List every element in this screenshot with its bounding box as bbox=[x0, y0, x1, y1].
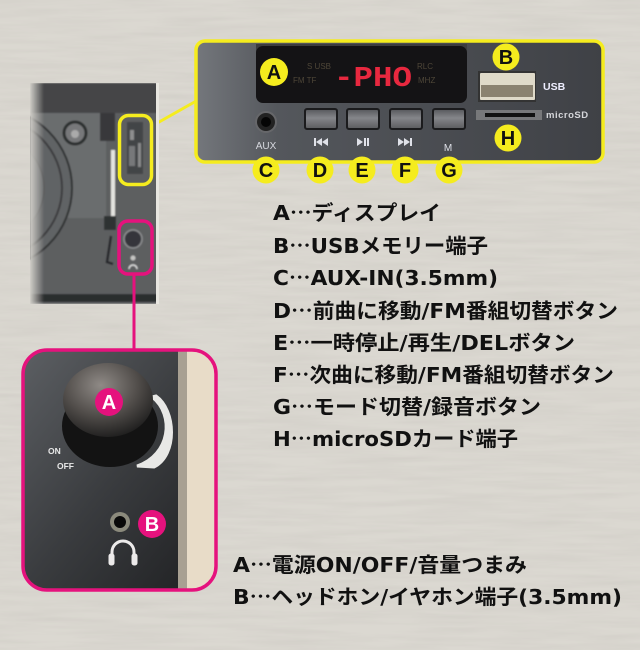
text block: panel legend: H…microSDカード端子 bbox=[273, 422, 518, 452]
microSD slot: microSD bbox=[546, 110, 589, 121]
display window: S USB bbox=[307, 62, 331, 71]
miniature control panel bbox=[127, 122, 143, 174]
ON OFF label bbox=[48, 448, 74, 469]
markers: magenta letter badges: B bbox=[145, 514, 159, 536]
ON OFF label: OFF bbox=[57, 461, 74, 471]
markers: yellow letter badges: F bbox=[399, 160, 411, 182]
markers: magenta letter badges: A bbox=[102, 392, 116, 414]
button symbols bbox=[314, 138, 452, 154]
text block: panel legend: B…USBメモリー端子 bbox=[273, 229, 488, 259]
panel: rear control panel close-up bbox=[196, 41, 603, 162]
platter bbox=[30, 116, 74, 260]
display window: MHZ bbox=[418, 76, 435, 85]
button symbols: M bbox=[444, 143, 452, 154]
text block: panel legend bbox=[273, 196, 618, 452]
miniature knob bbox=[124, 230, 142, 269]
markers: yellow letter badges: G bbox=[441, 160, 457, 182]
connector: magenta callout line bbox=[132, 274, 136, 350]
buttons bbox=[305, 109, 465, 129]
text block: knob legend: A…電源ON/OFF/音量つまみ bbox=[233, 548, 527, 578]
markers: yellow letter badges bbox=[252, 44, 522, 184]
callout frame: yellow on overview bbox=[120, 116, 152, 184]
tonearm bbox=[64, 113, 116, 264]
microSD slot bbox=[476, 110, 589, 121]
connector: yellow callout line bbox=[152, 100, 198, 126]
text block: panel legend: D…前曲に移動/FM番組切替ボタン bbox=[273, 294, 618, 324]
markers: yellow letter badges: C bbox=[259, 160, 273, 182]
markers: yellow letter badges: D bbox=[313, 160, 327, 182]
volume arc bbox=[137, 396, 172, 467]
USB port bbox=[478, 71, 566, 102]
text block: panel legend: G…モード切替/録音ボタン bbox=[273, 390, 541, 420]
display window bbox=[256, 44, 467, 103]
text block: panel legend: C…AUX-IN(3.5mm) bbox=[273, 261, 498, 291]
display window: RLC bbox=[417, 62, 433, 71]
markers: yellow letter badges: A bbox=[267, 62, 281, 84]
AUX jack bbox=[256, 112, 277, 152]
markers: yellow letter badges: B bbox=[499, 47, 513, 69]
markers: yellow letter badges: H bbox=[501, 128, 515, 150]
knob bbox=[62, 363, 158, 467]
panel: turntable overview photo bbox=[30, 83, 159, 304]
icon: headphones bbox=[110, 541, 136, 564]
headphone jack bbox=[110, 512, 130, 532]
callout frame: magenta on overview bbox=[119, 221, 152, 274]
ON OFF label: ON bbox=[48, 446, 61, 456]
display window: FM TF bbox=[293, 76, 317, 85]
USB port: USB bbox=[543, 81, 566, 93]
markers: magenta letter badges bbox=[95, 388, 166, 538]
text block: panel legend: F…次曲に移動/FM番組切替ボタン bbox=[273, 358, 614, 388]
text block: panel legend: E…一時停止/再生/DELボタン bbox=[273, 326, 575, 356]
text block: panel legend: A…ディスプレイ bbox=[273, 196, 441, 226]
display readout: -PHO bbox=[334, 62, 412, 95]
text block: knob legend bbox=[233, 548, 622, 610]
markers: yellow letter badges: E bbox=[355, 160, 369, 182]
panel: volume knob close-up bbox=[23, 350, 218, 590]
text block: knob legend: B…ヘッドホン/イヤホン端子(3.5mm) bbox=[233, 580, 622, 610]
AUX jack: AUX bbox=[256, 141, 277, 152]
